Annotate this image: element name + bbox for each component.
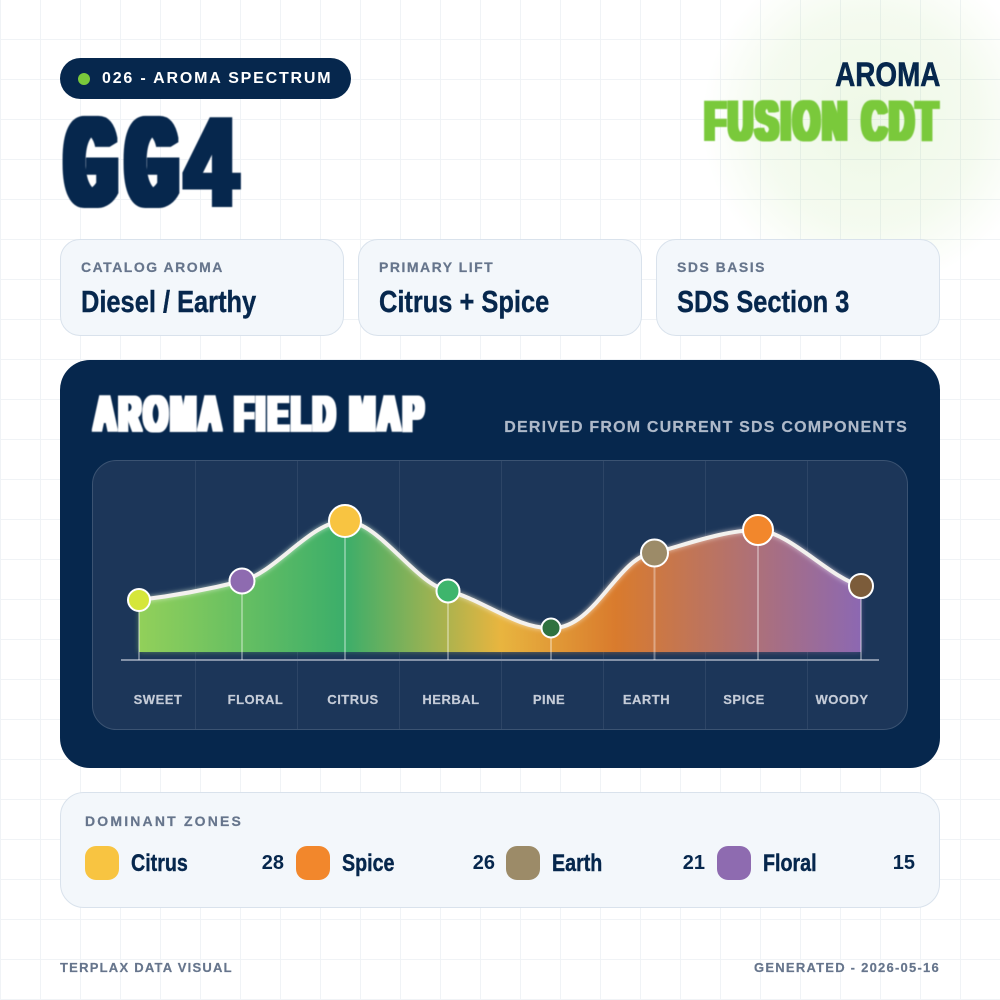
plot background bbox=[92, 460, 908, 730]
axis label: earth: EARTH bbox=[623, 692, 670, 707]
data points bbox=[128, 505, 873, 638]
title: product code: G bbox=[67, 94, 115, 232]
axis line bbox=[121, 659, 879, 661]
subtitle: derived from SDS: DERIVED FROM CURRENT SDS COMPONENTS bbox=[504, 419, 908, 436]
footer: source: TERPLAX DATA VISUAL bbox=[60, 960, 233, 975]
axis label: pine: PINE bbox=[533, 692, 565, 707]
axis label: woody: WOODY bbox=[815, 692, 869, 707]
card value: Citrus + Spice bbox=[379, 284, 549, 319]
card value: Diesel / Earthy bbox=[81, 284, 256, 319]
zone name: citrus: Citrus bbox=[131, 850, 188, 877]
swatch: earth bbox=[506, 846, 540, 880]
curve line bbox=[139, 521, 861, 628]
zone value: spice: 26 bbox=[473, 852, 495, 874]
heading: dominant zones: DOMINANT ZONES bbox=[85, 813, 243, 829]
badge status dot bbox=[78, 73, 90, 85]
swatch: floral bbox=[717, 846, 751, 880]
card label: CATALOG AROMA bbox=[81, 259, 224, 275]
panel: aroma field map bbox=[60, 360, 940, 768]
zone value: citrus: 28 bbox=[262, 852, 284, 874]
title: product code: 4 bbox=[185, 94, 237, 232]
zone name: earth: Earth bbox=[552, 850, 602, 877]
panel: catalog aroma bbox=[60, 239, 344, 336]
chart: aroma field area chart bbox=[92, 460, 908, 730]
zone value: earth: 21 bbox=[683, 852, 705, 874]
zone name: spice: Spice bbox=[342, 850, 395, 877]
title: product code: G bbox=[128, 94, 176, 232]
axis label: floral: FLORAL bbox=[228, 692, 283, 707]
badge text: 026 - AROMA SPECTRUM bbox=[102, 70, 332, 87]
drop lines bbox=[139, 521, 861, 660]
swatch: spice bbox=[296, 846, 330, 880]
axis label: citrus: CITRUS bbox=[327, 692, 379, 707]
panel: SDS basis bbox=[656, 239, 940, 336]
heading line two: FUSION CDT bbox=[705, 89, 941, 152]
card value: SDS Section 3 bbox=[677, 284, 849, 319]
zone name: floral: Floral bbox=[763, 850, 817, 877]
heading: aroma field map: AROMA FIELD MAP bbox=[94, 386, 427, 442]
swatch: citrus bbox=[85, 846, 119, 880]
title: product code bbox=[62, 94, 242, 232]
badge: series label bbox=[60, 58, 351, 99]
footer: generated date: GENERATED - 2026-05-16 bbox=[754, 960, 940, 975]
card label: PRIMARY LIFT bbox=[379, 259, 494, 275]
zone value: floral: 15 bbox=[893, 852, 915, 874]
panel: dominant zones bbox=[60, 792, 940, 908]
panel: primary lift bbox=[358, 239, 642, 336]
heading: aroma fusion bbox=[703, 56, 941, 152]
heading line one: AROMA bbox=[835, 56, 940, 94]
card label: SDS BASIS bbox=[677, 259, 766, 275]
area fill bbox=[139, 521, 861, 652]
axis label: spice: SPICE bbox=[723, 692, 765, 707]
axis label: herbal: HERBAL bbox=[422, 692, 480, 707]
axis label: sweet: SWEET bbox=[134, 692, 182, 707]
